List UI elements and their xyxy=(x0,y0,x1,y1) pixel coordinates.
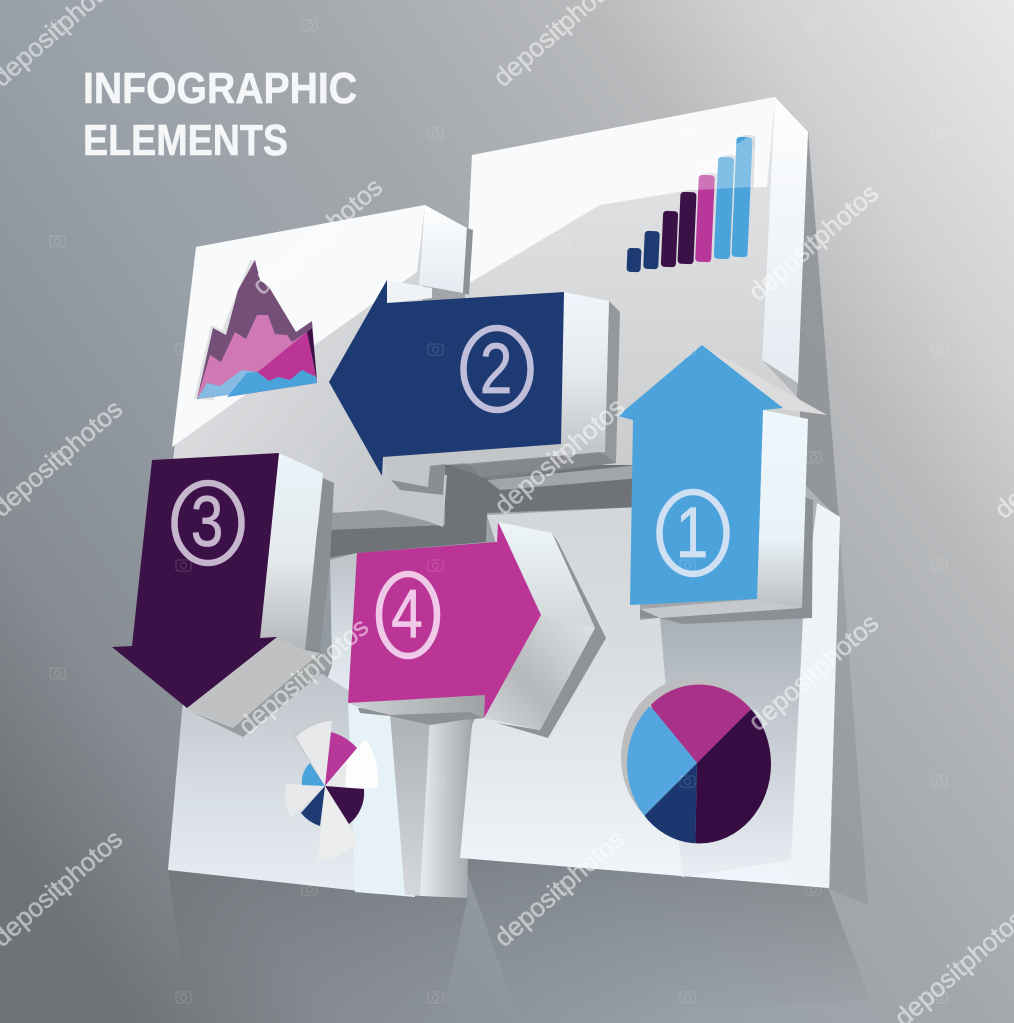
number 2 xyxy=(464,328,530,410)
arrow 1: blue xyxy=(618,345,827,624)
recessed dark band xyxy=(305,465,640,665)
panel: center column xyxy=(320,553,357,705)
number 1: 1 xyxy=(676,492,708,572)
chart: mini pie xyxy=(285,719,378,860)
number 3 xyxy=(174,481,242,563)
number 4 xyxy=(379,574,437,656)
arrow 2: navy xyxy=(329,280,620,495)
watermarks: depositphotos xyxy=(232,612,374,741)
number 2: 2 xyxy=(480,328,512,408)
chart: large pie xyxy=(621,684,771,844)
title: INFOGRAPHIC xyxy=(83,64,357,113)
watermarks: depositphotos xyxy=(246,172,388,301)
title: ELEMENTS xyxy=(83,116,288,165)
watermarks: depositphotos xyxy=(742,178,884,307)
title xyxy=(83,64,357,165)
floor shadows xyxy=(168,130,870,1023)
watermarks: depositphotos xyxy=(488,392,630,521)
watermarks: depositphotos xyxy=(488,824,630,953)
panel: top right xyxy=(465,97,808,480)
watermarks: depositphotos xyxy=(742,608,884,737)
number 3: 3 xyxy=(191,481,223,561)
chart: area mountain xyxy=(194,260,317,400)
chart: bar chart xyxy=(626,134,756,272)
arrow 3: purple xyxy=(112,453,334,737)
panel: bottom right xyxy=(460,503,840,888)
number 1 xyxy=(660,492,726,574)
panel: top left xyxy=(172,205,473,530)
arrow 4: magenta xyxy=(348,522,606,738)
panel: bottom left xyxy=(168,660,471,898)
number 4: 4 xyxy=(391,576,423,652)
